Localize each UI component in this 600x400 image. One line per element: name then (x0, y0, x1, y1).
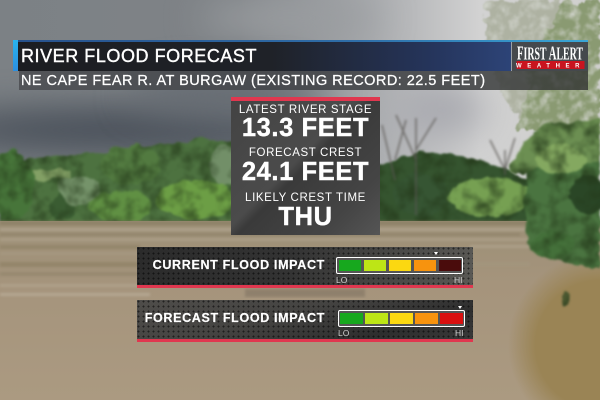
level 1 (340, 313, 362, 324)
level 1 (338, 260, 361, 271)
logo: First Alert Weather (511, 42, 588, 71)
bare trees (382, 115, 515, 215)
level 5 (440, 313, 462, 324)
current impact red rule (137, 285, 473, 288)
level 4 (415, 313, 438, 324)
title bar (13, 40, 588, 71)
level 2 (365, 313, 388, 324)
current impact label: CURRENT FLOOD IMPACT (153, 258, 325, 272)
subtitle text: NE CAPE FEAR R. AT BURGAW (EXISTING RECORD: 22.5 FEET) (21, 73, 485, 89)
level 2 (364, 260, 386, 271)
value: Thursday: THU (278, 203, 333, 231)
panel: forecast flood impact (137, 300, 473, 342)
forecast impact red rule (137, 339, 473, 342)
logo red strip: WEATHER (516, 63, 585, 69)
panel: river stage stats (231, 97, 380, 235)
water bands (0, 221, 600, 296)
overhanging tree on the right (485, 0, 600, 130)
forecast impact label: FORECAST FLOOD IMPACT (145, 311, 325, 325)
current impact meter (336, 257, 463, 274)
label: latest river stage: LATEST RIVER STAGE (239, 104, 372, 116)
HI label: HI (454, 275, 462, 285)
value: 13.3 feet: 13.3 FEET (242, 114, 369, 142)
title top rule (18, 40, 588, 42)
label: forecast crest: FORECAST CREST (249, 147, 362, 159)
forecast impact meter (338, 310, 464, 327)
level 3 (390, 313, 412, 324)
level 5 (438, 260, 461, 271)
LO label: LO (338, 328, 349, 338)
panel: current flood impact (137, 247, 473, 288)
value: 24.1 feet: 24.1 FEET (242, 158, 369, 186)
level 3 (388, 260, 411, 271)
HI label: HI (455, 328, 464, 338)
LO label: LO (336, 275, 347, 285)
current impact marker (434, 252, 438, 255)
label: likely crest time: LIKELY CREST TIME (245, 192, 366, 204)
title text: RIVER FLOOD FORECAST (21, 46, 257, 66)
title accent (13, 40, 18, 71)
subtitle bar (19, 71, 588, 90)
level 4 (414, 260, 436, 271)
panel red top rule (231, 97, 380, 101)
forecast impact marker (458, 306, 462, 309)
